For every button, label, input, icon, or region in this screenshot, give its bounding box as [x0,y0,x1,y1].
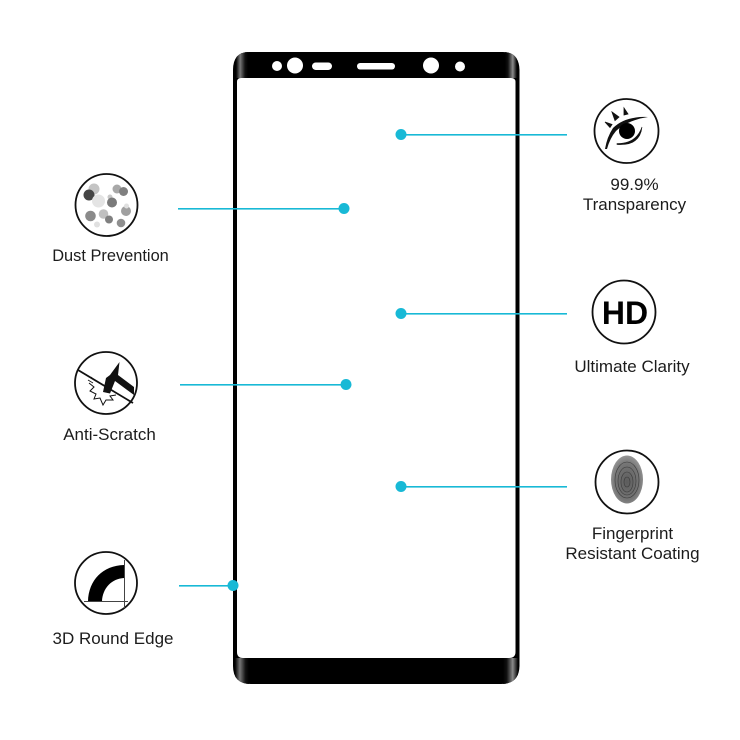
label: 99.9% transparency [583,175,687,214]
label: anti-scratch: Anti-Scratch [63,425,156,444]
icon: 3D round edge [75,552,137,614]
label: fingerprint resistant coating [565,524,700,563]
phone screen protector [233,52,520,684]
label: 3D round edge: 3D Round Edge [53,629,173,648]
callout line: anti-scratch [180,379,352,390]
icon: eye [594,99,658,163]
label: dust prevention: Dust Prevention [52,247,169,265]
white screen area [237,78,516,658]
callout line: transparency [396,129,567,140]
icon: HD: HD [602,295,648,331]
label: ultimate clarity: Ultimate Clarity [574,357,690,376]
icon: dust prevention [76,174,138,236]
sensor cutouts [272,58,465,74]
icon: fingerprint [596,450,658,514]
icon: anti-scratch hammer [75,352,137,414]
icon: HD [592,280,656,344]
callout line: dust prevention [178,203,350,214]
callout line: fingerprint coating [396,481,567,492]
callout line: ultimate clarity [396,308,567,319]
label: 99.9% transparency: 99.9% [610,175,659,194]
corner highlights [235,52,518,684]
label: 99.9% transparency: Transparency [583,195,687,214]
callout line: 3D round edge [179,580,238,591]
label: fingerprint resistant coating: Fingerprint [592,524,673,543]
label: fingerprint resistant coating: Resistant Coating [565,544,700,563]
